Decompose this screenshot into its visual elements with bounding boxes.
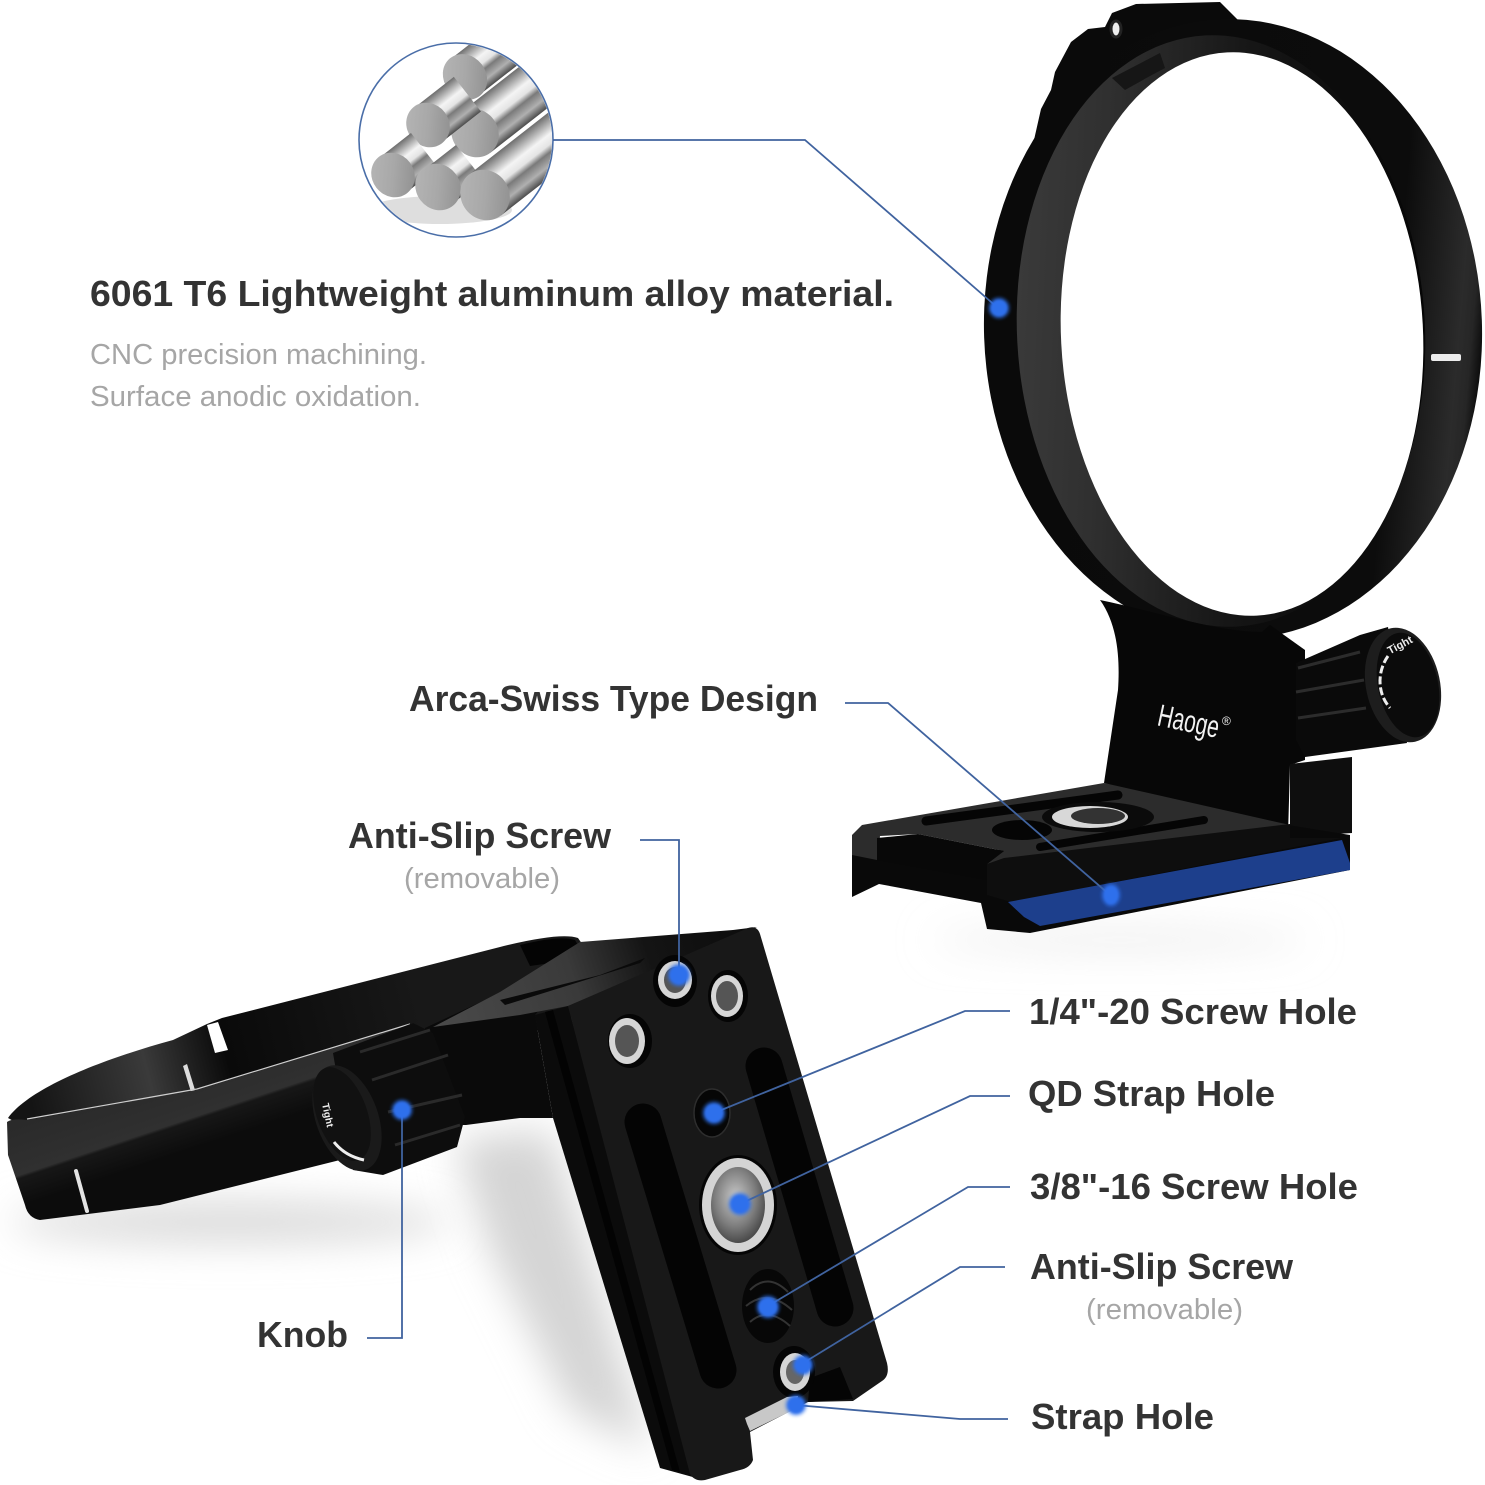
ring outer: [973, 10, 1485, 648]
screw right: [708, 970, 748, 1022]
icon: rod middle left: [406, 77, 481, 148]
bottom product: stand: [425, 927, 757, 1125]
bottom product: knob: [299, 1023, 465, 1180]
band index mark: [76, 1171, 87, 1211]
leader: knob: [367, 1110, 402, 1338]
callout dots: [393, 299, 1119, 1414]
quarter inch hole: [694, 1089, 730, 1137]
registered mark: ®: [1222, 714, 1231, 728]
anti-slip screw top: [653, 955, 697, 1007]
knob ridges: [360, 1030, 462, 1145]
stand top surface: [433, 927, 757, 1027]
ring opening: [1046, 43, 1438, 625]
front band: [7, 1023, 440, 1220]
leader: strap hole: [795, 1405, 1008, 1419]
leader: three-eighths hole: [768, 1187, 1010, 1306]
leader: lower anti-slip screw: [800, 1267, 1005, 1365]
clamp pin: [1111, 21, 1121, 37]
bottom product: plate: [535, 927, 888, 1480]
knob cap: [1355, 621, 1451, 749]
label: top anti-slip screw: (removable): [404, 863, 560, 895]
three-eighths hole: [742, 1269, 794, 1343]
leader: material: [553, 140, 998, 308]
icon: rod lower right: [460, 112, 552, 220]
band rim highlight: [27, 1024, 410, 1119]
icon: rod lower middle: [415, 145, 476, 210]
leader: QD strap hole: [738, 1096, 1010, 1205]
heading: material: 6061 T6 Lightweight aluminum alloy material.: [90, 273, 894, 314]
label: QD strap hole: QD Strap Hole: [1028, 1073, 1275, 1114]
leader: Arca-Swiss: [845, 703, 1110, 895]
text: machining details: Surface anodic oxidation.: [90, 381, 421, 413]
plate underside: [852, 825, 1350, 933]
top product: Arca plate: [852, 783, 1350, 933]
top product: knob: [1296, 621, 1451, 757]
soft floor shadows: [10, 932, 1310, 1450]
label: Arca-Swiss: Arca-Swiss Type Design: [409, 678, 818, 719]
rear ring: [8, 936, 640, 1130]
knob ridges: [1296, 652, 1366, 718]
plate face: [568, 927, 888, 1480]
icon: rod back top: [442, 44, 517, 100]
QD socket: [699, 1155, 777, 1255]
icon: aluminum rods medallion: [358, 42, 554, 238]
label: lower anti-slip screw: (removable): [1086, 1294, 1243, 1326]
plate side: [535, 1006, 700, 1479]
ring clamp gap: [207, 1022, 228, 1053]
strap notch: [808, 1367, 853, 1402]
text: machining details: CNC precision machining.: [90, 339, 427, 371]
plate front face: [987, 824, 1342, 902]
leader: quarter inch hole: [714, 1011, 1010, 1113]
plate notch: [877, 834, 1004, 880]
right slot: [764, 1066, 835, 1308]
top product: collar ring: [973, 2, 1485, 648]
label: three-eighths hole: 3/8"-16 Screw Hole: [1030, 1166, 1358, 1207]
stand slot: [500, 958, 645, 1005]
screw left: [608, 1014, 652, 1068]
knob arrow: [334, 1142, 364, 1160]
clamp tab: [1112, 53, 1165, 90]
label: quarter inch hole: 1/4"-20 Screw Hole: [1029, 991, 1357, 1032]
anti-slip screw bottom: [773, 1346, 815, 1398]
leader: top anti-slip screw: [640, 840, 679, 975]
ring inner surface: [1002, 25, 1440, 637]
silver mount ring: [1042, 802, 1154, 832]
clamp bump: [1034, 2, 1242, 140]
icon: rod lower left: [371, 133, 434, 198]
Haoge logo: Haoge: [1155, 698, 1223, 745]
text: machining details: [90, 339, 427, 413]
icon: rod middle right: [452, 67, 547, 158]
ring opening highlight: [520, 938, 585, 966]
blue highlighted dovetail: [1008, 840, 1350, 926]
stand side block: [1290, 757, 1352, 837]
bottom product: collar ring: [7, 936, 640, 1220]
knob arrow: [1380, 656, 1390, 708]
label: lower anti-slip screw: [1030, 1246, 1294, 1326]
label: lower anti-slip screw: Anti-Slip Screw: [1030, 1246, 1294, 1287]
label: knob: Knob: [257, 1314, 348, 1355]
top product: bracket stand: [1100, 600, 1352, 837]
label: top anti-slip screw: [348, 815, 612, 895]
label: top anti-slip screw: Anti-Slip Screw: [348, 815, 612, 856]
plate slots and hole: [926, 795, 1118, 821]
left slot: [643, 1122, 718, 1370]
ring inner mark: [183, 1064, 195, 1092]
ring index mark: [1431, 354, 1461, 361]
label: strap hole: Strap Hole: [1031, 1396, 1214, 1437]
knob cap: [299, 1056, 395, 1180]
strap slot: [745, 1396, 798, 1431]
plate top surface: [852, 783, 1290, 884]
knob legend: Tight: [319, 1102, 335, 1129]
knob legend: Tight: [1386, 634, 1415, 657]
plate side strip: [545, 1010, 680, 1472]
